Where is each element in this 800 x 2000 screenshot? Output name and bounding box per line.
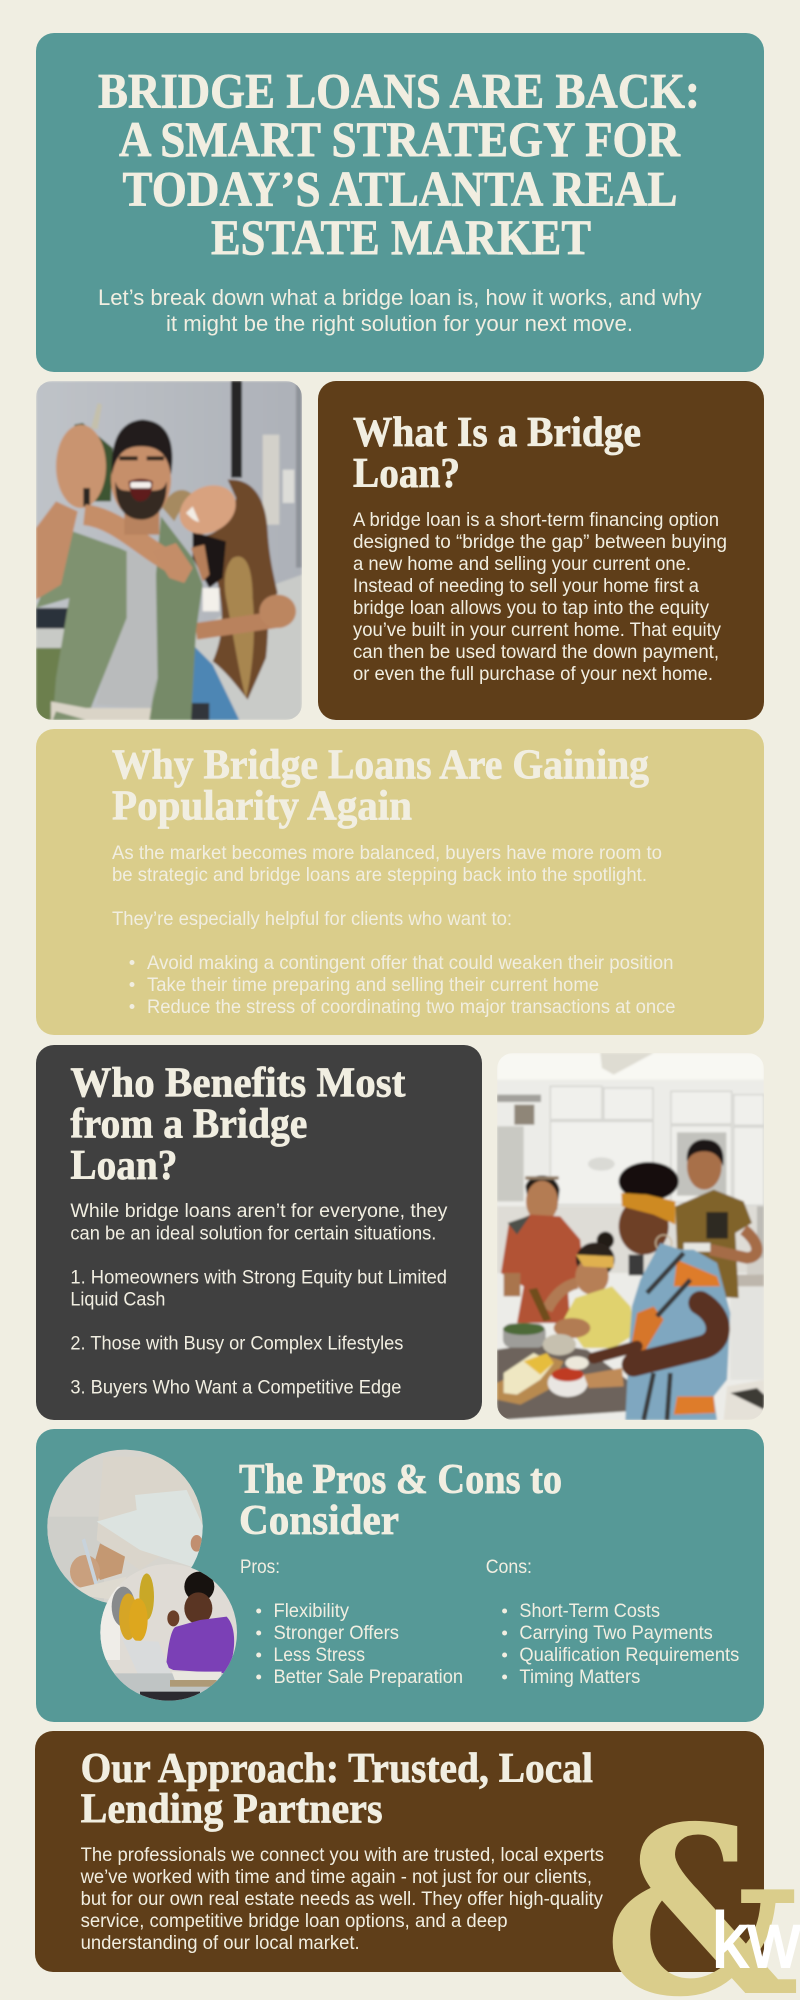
tee [102, 670, 109, 684]
subtitle [98, 285, 702, 336]
body text: or even the full purchase of your next home. [353, 664, 713, 685]
body text [353, 510, 727, 685]
photo circle: woman at laptop [100, 1563, 237, 1703]
heading: What Is a Bridge [353, 410, 641, 456]
bullet list: Take their time preparing and selling their current home [147, 975, 599, 996]
intro text [112, 843, 662, 930]
photo circle: hands with paperwork [47, 1450, 203, 1603]
heading: Popularity Again [112, 784, 412, 830]
man's face [124, 508, 159, 535]
panel: pros and cons [36, 1429, 764, 1722]
intro text: They’re especially helpful for clients who want to: [112, 909, 512, 930]
intro text: As the market becomes more balanced, buyers have more room to [112, 843, 662, 864]
woman's face [178, 484, 238, 536]
cons list [486, 1557, 739, 1688]
body text: 2. Those with Busy or Complex Lifestyles [70, 1334, 403, 1354]
pros list [240, 1557, 463, 1688]
body text [70, 1201, 448, 1398]
body text: can be an ideal solution for certain situations. [70, 1223, 436, 1244]
intro text: be strategic and bridge loans are stepping back into the spotlight. [112, 865, 647, 886]
title: A SMART STRATEGY FOR [119, 111, 681, 167]
heading [112, 742, 649, 830]
woman's far arm and fist [196, 620, 276, 631]
body text: we’ve worked with time and time again - not just for our clients, [80, 1867, 592, 1888]
panel: why bridge loans are gaining popularity [36, 729, 764, 1035]
title: BRIDGE LOANS ARE BACK: [98, 62, 700, 118]
photo: couple holding house key [36, 381, 302, 720]
body text: While bridge loans aren’t for everyone, they [70, 1201, 448, 1222]
body text: 3. Buyers Who Want a Competitive Edge [70, 1378, 401, 1398]
pros list: Better Sale Preparation [274, 1667, 463, 1688]
heading: Loan? [70, 1143, 177, 1189]
cons list: Timing Matters [519, 1667, 640, 1688]
body text: The professionals we connect you with are trusted, local experts [81, 1845, 604, 1866]
panel: our approach [35, 1731, 764, 1972]
cons list: Qualification Requirements [519, 1645, 739, 1666]
pros list: Less Stress [274, 1645, 365, 1666]
jeans [191, 645, 239, 720]
body text: designed to “bridge the gap” between buying [353, 532, 727, 553]
body text: Instead of needing to sell your home first a [353, 576, 699, 597]
body text: Liquid Cash [70, 1289, 165, 1310]
title [98, 62, 700, 265]
body text: you’ve built in your current home. That equity [353, 620, 721, 641]
hair of woman [205, 478, 279, 700]
body text: can then be used toward the down payment, [353, 642, 719, 663]
heading: Consider [239, 1498, 399, 1544]
teen boy [687, 1143, 722, 1190]
heading: Why Bridge Loans Are Gaining [112, 742, 649, 788]
body text: bridge loan allows you to tap into the equity [353, 598, 709, 619]
heading [81, 1746, 593, 1832]
heading: The Pros & Cons to [239, 1457, 562, 1503]
pros list: Pros: [240, 1557, 280, 1578]
heading: from a Bridge [70, 1102, 307, 1148]
heading [70, 1060, 405, 1189]
body text: 1. Homeowners with Strong Equity but Limited [70, 1267, 447, 1288]
woman's arm around man [84, 515, 169, 561]
cons list: Carrying Two Payments [519, 1623, 713, 1644]
heading: Who Benefits Most [70, 1060, 405, 1106]
photo: family cooking in kitchen [497, 1053, 764, 1420]
girl [597, 1232, 614, 1249]
body text: service, competitive bridge loan options, and a deep [81, 1911, 508, 1932]
heading: Our Approach: Trusted, Local [81, 1746, 593, 1792]
panel: what is a bridge loan [318, 381, 764, 720]
body text: A bridge loan is a short-term financing option [353, 510, 719, 531]
body text: but for our own real estate needs as well. They offer high-quality [81, 1889, 603, 1910]
panel: who benefits most [36, 1045, 482, 1420]
body text: a new home and selling your current one. [353, 554, 691, 575]
shirt [36, 530, 127, 720]
cons list: Cons: [486, 1557, 532, 1578]
heading: Lending Partners [81, 1786, 383, 1832]
woman with headband [619, 1162, 679, 1201]
bullet list [130, 953, 676, 1018]
heading [353, 410, 641, 497]
bullet list: Reduce the stress of coordinating two major transactions at once [147, 997, 676, 1018]
body text [80, 1845, 604, 1954]
counter and food [497, 1344, 629, 1420]
raised arm and fist [36, 501, 78, 600]
mother [525, 1175, 560, 1213]
title: ESTATE MARKET [211, 209, 591, 265]
pros list: Flexibility [274, 1601, 349, 1622]
heading: Loan? [353, 451, 460, 497]
pros list: Stronger Offers [274, 1623, 399, 1644]
subtitle: Let’s break down what a bridge loan is, how it works, and why [98, 285, 702, 310]
body text: understanding of our local market. [81, 1933, 360, 1954]
bullet list: Avoid making a contingent offer that could weaken their position [147, 953, 674, 974]
cons list: Short-Term Costs [519, 1601, 660, 1622]
panel: header [36, 33, 764, 372]
subtitle: it might be the right solution for your next move. [166, 311, 633, 336]
heading [239, 1457, 562, 1544]
title: TODAY’S ATLANTA REAL [122, 160, 678, 216]
